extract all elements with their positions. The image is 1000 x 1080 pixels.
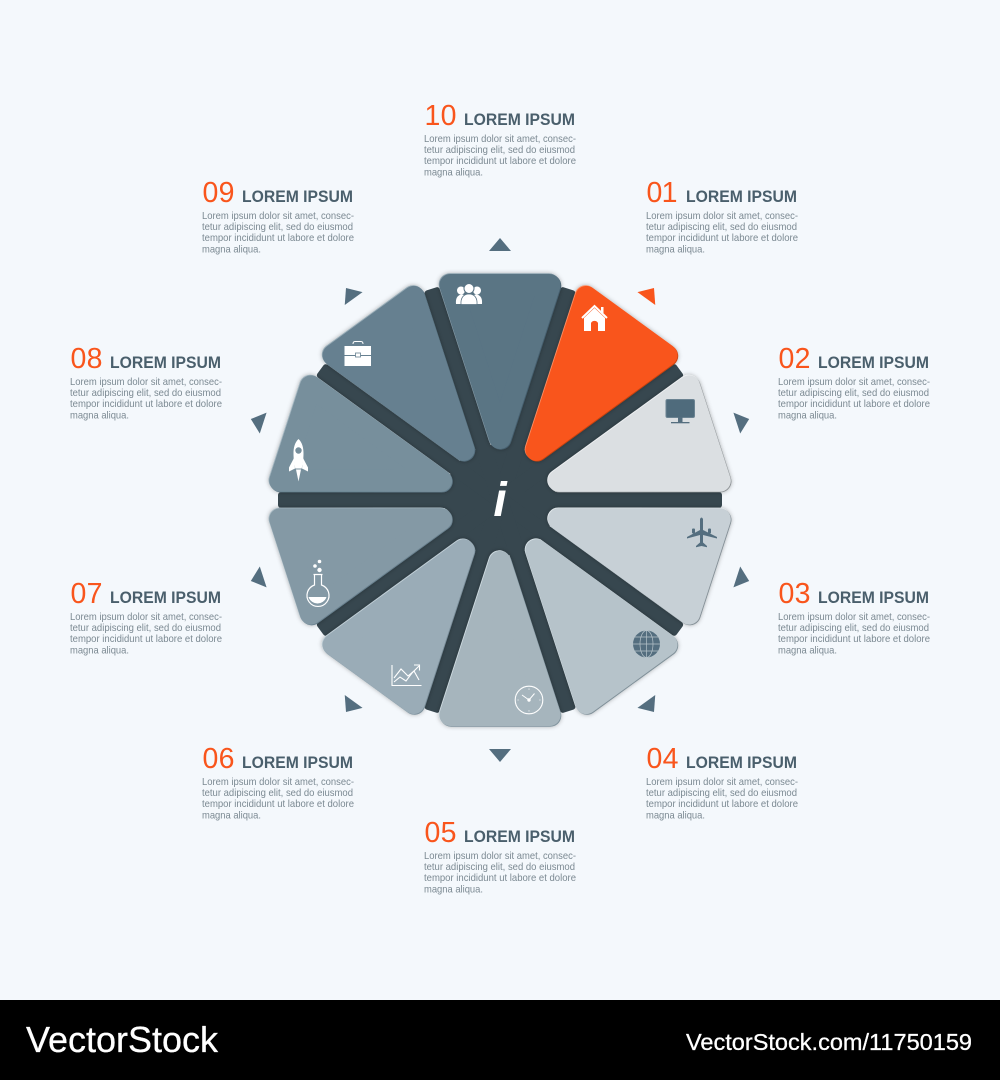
segment 09	[333, 296, 504, 480]
text block 06: tetur adipiscing elit, sed do eiusmod	[202, 788, 353, 799]
icon: people	[456, 284, 482, 304]
text block 04: Lorem ipsum dolor sit amet, consec-	[646, 777, 798, 788]
text block 08: Lorem ipsum dolor sit amet, consec-	[70, 377, 222, 388]
text block 01	[646, 177, 798, 256]
text block 06: magna aliqua.	[202, 810, 261, 822]
segment 10	[450, 284, 550, 439]
text block 10: Lorem ipsum dolor sit amet, consec-	[424, 134, 576, 145]
segment 01 highlighted	[496, 296, 667, 480]
text block 05: tempor incididunt ut labore et dolore	[424, 873, 576, 884]
text block 02	[778, 343, 930, 422]
icon: airplane	[687, 518, 717, 547]
icon: line chart	[392, 665, 422, 686]
text block 07: tempor incididunt ut labore et dolore	[70, 634, 222, 645]
dark hub with spokes	[278, 286, 722, 714]
text block 06: Lorem ipsum dolor sit amet, consec-	[202, 777, 354, 788]
watermark logo text: VectorStock	[26, 1019, 219, 1060]
text block 06: 06	[202, 743, 234, 775]
text block 09: Lorem ipsum dolor sit amet, consec-	[202, 211, 354, 222]
text block 06: tempor incididunt ut labore et dolore	[202, 799, 354, 810]
text block 08	[70, 343, 222, 422]
icon: monitor	[666, 400, 694, 423]
segment 02	[543, 386, 721, 529]
icon: flask	[307, 560, 329, 606]
segment 06	[333, 520, 504, 704]
text block 01: tempor incididunt ut labore et dolore	[646, 233, 798, 244]
text block 02: tetur adipiscing elit, sed do eiusmod	[778, 388, 929, 399]
text block 08: magna aliqua.	[70, 410, 129, 422]
direction arrows	[247, 238, 753, 762]
text block 03: 03	[778, 578, 810, 610]
text block 02: Lorem ipsum dolor sit amet, consec-	[778, 377, 930, 388]
text block 03: tempor incididunt ut labore et dolore	[778, 634, 930, 645]
text block 10: 10	[424, 100, 456, 132]
icon: globe	[633, 630, 660, 658]
text block 09: LOREM IPSUM	[242, 187, 353, 206]
text block 02: LOREM IPSUM	[818, 353, 929, 372]
text block 02: tempor incididunt ut labore et dolore	[778, 399, 930, 410]
icon: clock	[515, 686, 543, 714]
segment 07	[279, 471, 457, 614]
text block 05: LOREM IPSUM	[464, 827, 575, 846]
segment 05	[450, 561, 550, 716]
text block 07: tetur adipiscing elit, sed do eiusmod	[70, 623, 221, 634]
segment 04	[496, 520, 667, 704]
text block 04: tempor incididunt ut labore et dolore	[646, 799, 798, 810]
text block 03	[778, 578, 930, 656]
text block 03: tetur adipiscing elit, sed do eiusmod	[778, 623, 929, 634]
text block 01: Lorem ipsum dolor sit amet, consec-	[646, 211, 798, 222]
text block 09: 09	[202, 177, 234, 209]
text block 01: LOREM IPSUM	[686, 187, 797, 206]
text block 10: tempor incididunt ut labore et dolore	[424, 156, 576, 167]
text block 03: magna aliqua.	[778, 646, 837, 656]
text block 10	[424, 100, 576, 178]
text block 09	[202, 177, 354, 256]
text block 04: tetur adipiscing elit, sed do eiusmod	[646, 788, 797, 799]
icon: rocket	[289, 439, 308, 482]
text block 04: 04	[646, 743, 679, 775]
text block 07: magna aliqua.	[70, 646, 129, 656]
text block 04	[646, 743, 798, 822]
text block 05: magna aliqua.	[424, 884, 483, 896]
text block 07: 07	[70, 578, 102, 610]
text block 07: LOREM IPSUM	[110, 588, 221, 607]
segment 08	[279, 386, 457, 529]
text block 06	[202, 743, 354, 822]
text block 08: tetur adipiscing elit, sed do eiusmod	[70, 388, 221, 399]
text block 03: LOREM IPSUM	[818, 588, 929, 607]
text block 10: magna aliqua.	[424, 168, 483, 178]
text block 08: LOREM IPSUM	[110, 353, 221, 372]
text block 02: 02	[778, 343, 810, 375]
text block 08: tempor incididunt ut labore et dolore	[70, 399, 222, 410]
text block 10: tetur adipiscing elit, sed do eiusmod	[424, 145, 575, 156]
text block 03: Lorem ipsum dolor sit amet, consec-	[778, 612, 930, 623]
text block 04: magna aliqua.	[646, 810, 705, 822]
text block 08: 08	[70, 343, 102, 375]
text block 04: LOREM IPSUM	[686, 753, 797, 772]
text block 05: 05	[424, 817, 456, 849]
icon: briefcase	[344, 342, 371, 366]
text block 07	[70, 578, 222, 656]
text block 09: tempor incididunt ut labore et dolore	[202, 233, 354, 244]
text block 06: LOREM IPSUM	[242, 753, 353, 772]
text block 02: magna aliqua.	[778, 410, 837, 422]
segment 03	[543, 471, 721, 614]
text block 05	[424, 817, 576, 896]
text block 09: tetur adipiscing elit, sed do eiusmod	[202, 222, 353, 233]
footer bar	[0, 1000, 1000, 1080]
text block 10: LOREM IPSUM	[464, 110, 575, 129]
watermark url: VectorStock.com/11750159	[686, 1029, 972, 1055]
text block 01: magna aliqua.	[646, 244, 705, 256]
text block 09: magna aliqua.	[202, 244, 261, 256]
center info letter: i	[493, 474, 508, 527]
text block 05: tetur adipiscing elit, sed do eiusmod	[424, 862, 575, 873]
icon: house	[582, 306, 607, 331]
text block 05: Lorem ipsum dolor sit amet, consec-	[424, 851, 576, 862]
text block 01: 01	[646, 177, 678, 209]
text block 01: tetur adipiscing elit, sed do eiusmod	[646, 222, 797, 233]
text block 07: Lorem ipsum dolor sit amet, consec-	[70, 612, 222, 623]
